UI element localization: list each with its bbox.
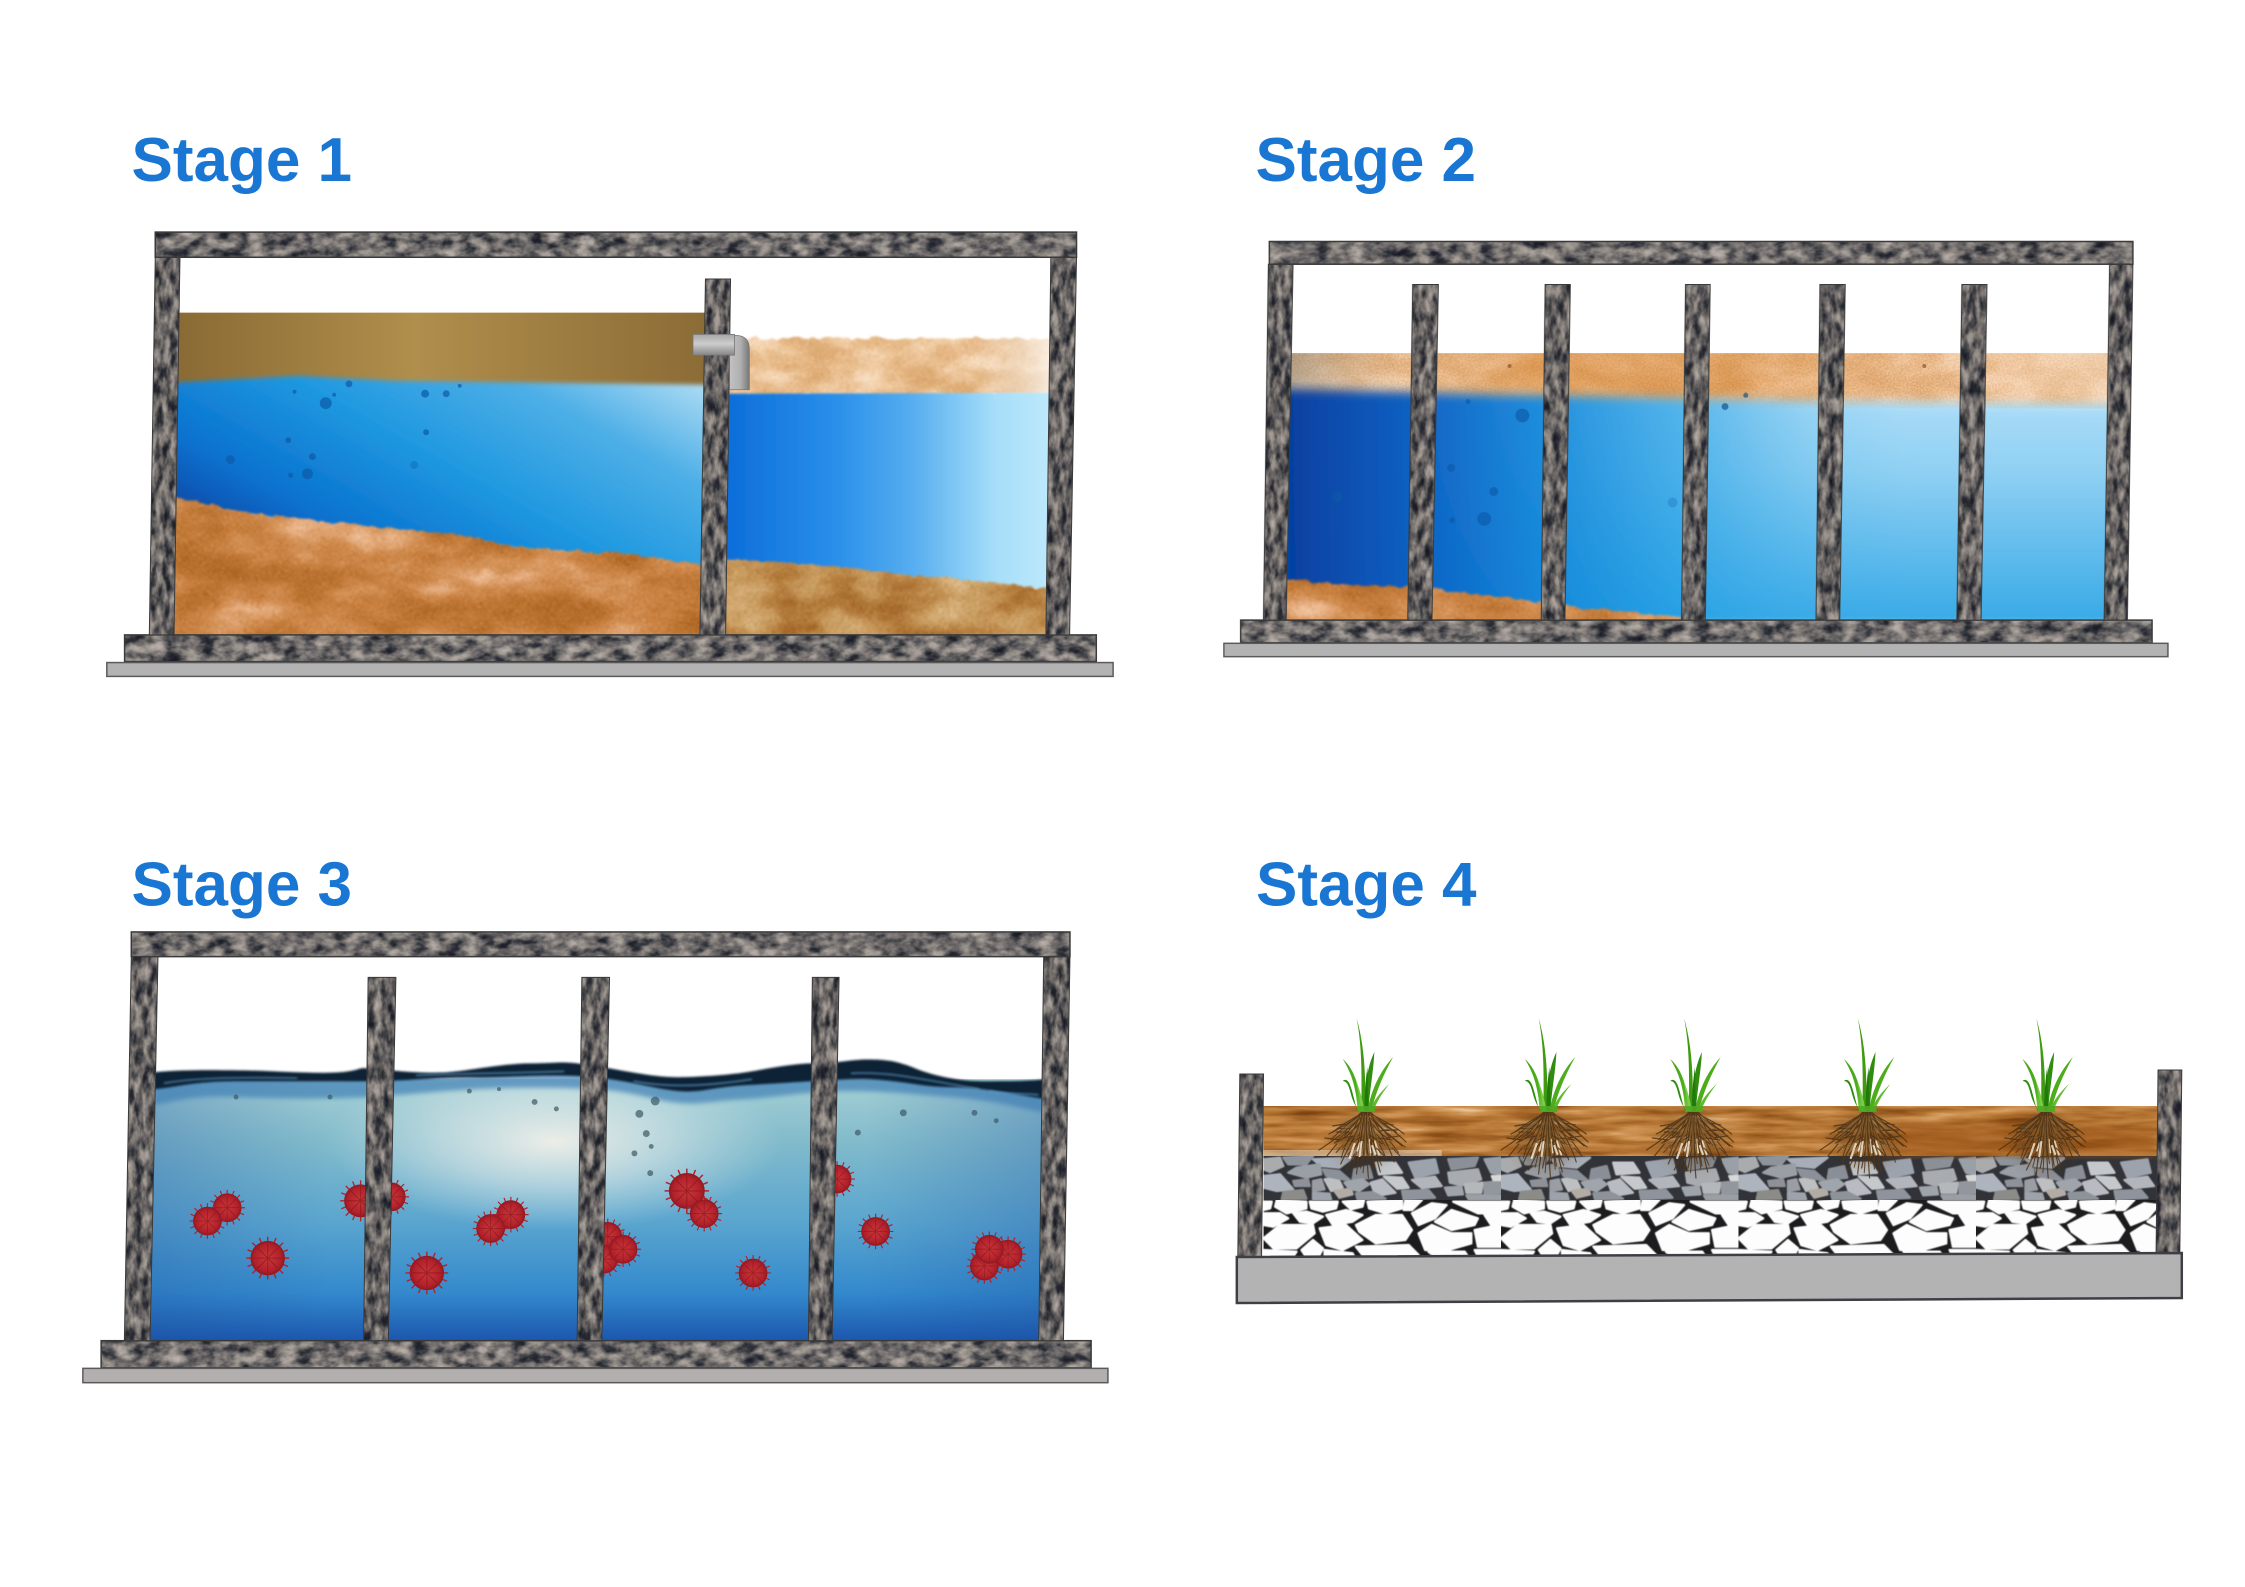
roof slab xyxy=(1269,241,2133,264)
bubbles and particles xyxy=(1332,364,1926,526)
left chamber: settled sludge xyxy=(167,497,708,639)
outer walls xyxy=(124,957,1070,1341)
water body xyxy=(150,1079,1042,1340)
surface wave band xyxy=(154,1059,1045,1113)
tank: stage 3 cross-section xyxy=(83,932,1108,1383)
base plate xyxy=(83,1368,1108,1383)
heading: Stage 1: Stage 1 xyxy=(132,126,352,195)
left chamber: bubbles xyxy=(226,380,462,479)
right retaining wall xyxy=(2156,1070,2182,1253)
right wall xyxy=(1046,257,1077,635)
base plate xyxy=(107,663,1113,676)
foundation slab xyxy=(125,635,1096,662)
plant 3: reed and roots xyxy=(1646,1018,1734,1178)
plant 5: reed and roots xyxy=(1999,1018,2086,1178)
panel: stage 1 two-chamber tank xyxy=(107,126,1113,676)
heading: Stage 2: Stage 2 xyxy=(1256,126,1476,195)
bed: stage 4 cross-section xyxy=(1237,1018,2182,1303)
roof slab xyxy=(155,232,1077,257)
right chamber: settled sludge xyxy=(721,559,1053,639)
tank: stage 2 cross-section xyxy=(1224,241,2168,657)
foundation slab xyxy=(1241,620,2152,643)
heading: Stage 4: Stage 4 xyxy=(1256,850,1477,920)
right chamber: clarified water xyxy=(721,393,1055,590)
five dividing walls xyxy=(1408,284,1987,620)
left wall xyxy=(149,257,180,635)
base plate xyxy=(1224,643,2168,657)
left chamber: muddy liquid layer xyxy=(175,313,706,392)
plant 1: reed and roots xyxy=(1319,1018,1406,1178)
foundation slab xyxy=(101,1341,1091,1368)
icon: connecting pipe xyxy=(693,334,749,390)
roof slab xyxy=(131,932,1070,957)
heading: Stage 3: Stage 3 xyxy=(132,850,352,920)
red pathogens xyxy=(190,1161,1026,1294)
water column gradient xyxy=(1279,389,2117,626)
plant 4: reed and roots xyxy=(1820,1018,1907,1178)
settled sludge wedge xyxy=(1284,579,1689,624)
layer: white coarse stones xyxy=(1264,1200,2157,1256)
layer: grey gravel xyxy=(1264,1156,2157,1200)
right chamber: surface scum layer xyxy=(728,333,1052,397)
panel: stage 2 six-chamber tank xyxy=(1224,126,2168,657)
panel: stage 3 tank with pathogens xyxy=(83,850,1108,1383)
outer walls xyxy=(1263,264,2133,620)
tank: stage 1 cross-section xyxy=(107,232,1113,676)
layer: brown soil xyxy=(1264,1106,2157,1156)
left retaining wall xyxy=(1238,1074,1264,1257)
plant 2: reed and roots xyxy=(1501,1018,1588,1178)
bubbles xyxy=(234,1087,999,1176)
surface sludge layer xyxy=(1286,353,2113,409)
panel: stage 4 planted filter bed xyxy=(1237,850,2182,1303)
left chamber: blue water xyxy=(169,376,713,575)
three dividing walls xyxy=(364,977,839,1341)
centre dividing wall xyxy=(700,279,731,635)
concrete base xyxy=(1237,1253,2182,1303)
